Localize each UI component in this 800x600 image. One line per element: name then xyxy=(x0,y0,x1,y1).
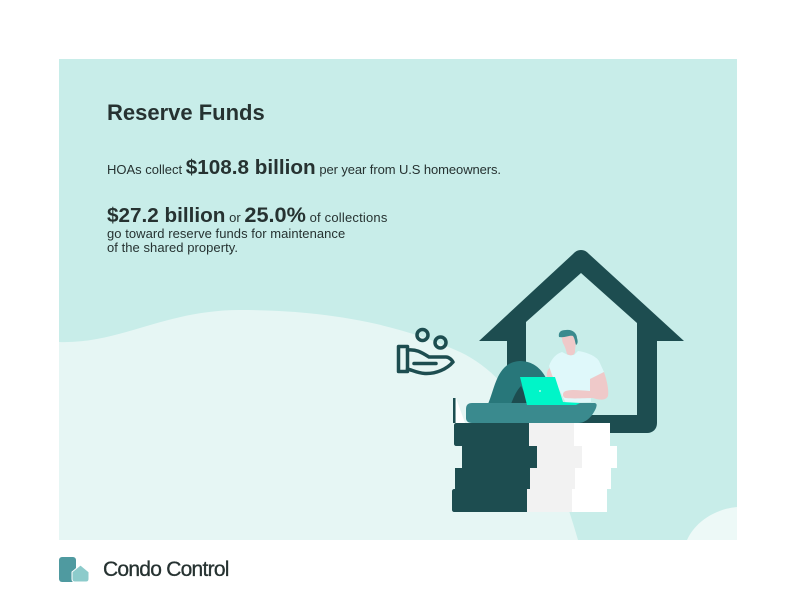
icon: hand with coins xyxy=(398,330,453,374)
neck and face xyxy=(562,335,576,355)
corner hill xyxy=(687,507,737,540)
background wave xyxy=(59,310,578,540)
text: annual collections: HOAs collect $108.8 billion per year from U.S homeowners. xyxy=(107,156,501,179)
dark coin stack xyxy=(452,423,537,512)
coin stacks xyxy=(452,423,617,512)
arm behind xyxy=(547,367,556,384)
title: Reserve Funds xyxy=(107,100,265,125)
hair xyxy=(559,330,578,345)
logo icon xyxy=(59,557,89,582)
laptop xyxy=(520,377,580,405)
panel: background xyxy=(59,59,737,540)
figure: person with laptop xyxy=(453,330,608,423)
small dark marker xyxy=(456,398,465,423)
text: reserve fund share: of the shared property. xyxy=(107,240,238,255)
logo wordmark: Condo Control xyxy=(103,558,229,581)
white coin stack xyxy=(572,423,617,512)
shirt xyxy=(549,351,604,403)
icon: house xyxy=(479,250,684,433)
cushion xyxy=(466,403,597,423)
leg xyxy=(488,361,546,404)
arm xyxy=(563,372,608,400)
text: reserve fund share xyxy=(107,202,388,255)
grey coin stack xyxy=(527,423,582,512)
text: reserve fund share: $27.2 billion or 25.0% of collections xyxy=(107,202,388,227)
text: reserve fund share: go toward reserve funds for maintenance xyxy=(107,226,345,241)
